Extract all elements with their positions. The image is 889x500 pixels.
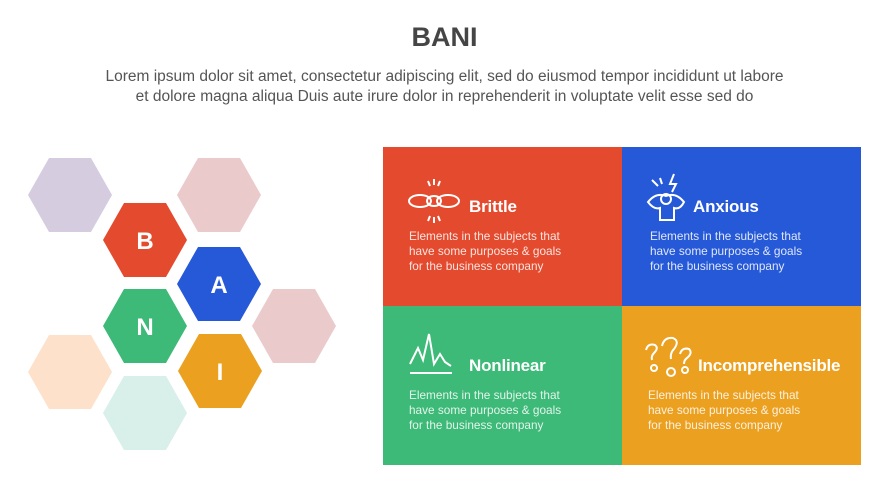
panel: nonlinear: Nonlinear [469,356,546,375]
panel: anxious: Elements in the subjects that [650,229,801,243]
hex N [103,289,187,363]
panel: brittle: Brittle [469,197,517,216]
hex A: A [210,272,228,299]
panel: nonlinear: have some purposes & goals [409,403,561,417]
panel: anxious: Anxious [693,197,759,216]
subtitle: Lorem ipsum dolor sit amet, consectetur adipiscing elit, sed do eiusmod tempor incididunt ut labore [105,68,784,85]
panel: incomprehensible: have some purposes & goals [648,403,800,417]
panel: incomprehensible: for the business company [648,418,782,432]
hex B: B [136,228,154,255]
hex A [177,247,261,321]
panel: brittle: for the business company [409,259,543,273]
hex B [103,203,187,277]
title: BANI [412,22,478,52]
panel: brittle: Elements in the subjects that [409,229,560,243]
panel: nonlinear: for the business company [409,418,543,432]
icon: broken chain [408,179,460,223]
panel: nonlinear [383,306,622,465]
panel: incomprehensible: Elements in the subjects that [648,388,799,402]
hex N: N [136,314,154,341]
panel: anxious: have some purposes & goals [650,244,802,258]
panel: brittle [383,147,622,306]
panel: brittle: have some purposes & goals [409,244,561,258]
hex I: I [217,359,223,386]
icon: anxious person [646,174,686,221]
panel: nonlinear: Elements in the subjects that [409,388,560,402]
subtitle: et dolore magna aliqua Duis aute irure dolor in reprehenderit in voluptate velit esse sed do [136,88,753,105]
panel: incomprehensible: Incomprehensible [698,356,840,375]
panel: anxious [622,147,861,306]
hexagon cluster [28,158,336,450]
panel: anxious: for the business company [650,259,784,273]
subtitle [105,68,784,105]
hex I [178,334,262,408]
icon: nonlinear graph [409,334,452,374]
icon: question marks [645,336,692,377]
panel: incomprehensible [622,306,861,465]
